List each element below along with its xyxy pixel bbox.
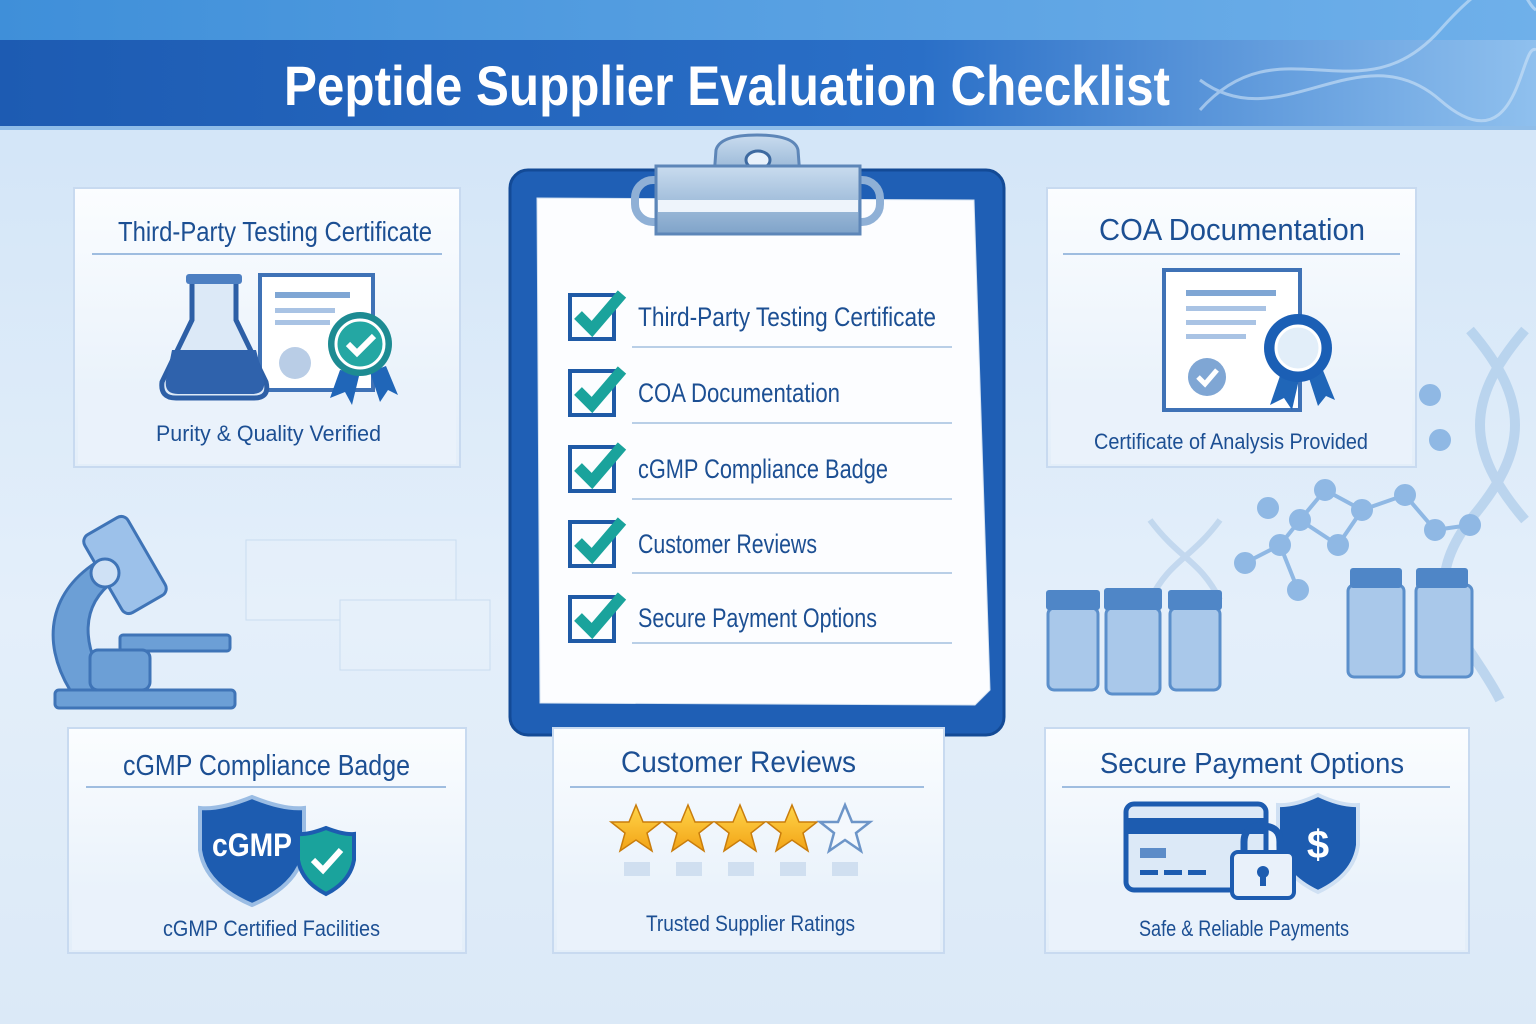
- icon: clip: [635, 135, 880, 234]
- title banner: [0, 40, 1536, 130]
- title banner: Peptide Supplier Evaluation Checklist: [284, 54, 1170, 117]
- checklist: Third-Party Testing Certificate: [638, 302, 936, 332]
- checklist: cGMP Compliance Badge: [638, 454, 888, 484]
- caption: Safe & Reliable Payments: [1139, 916, 1349, 941]
- icon: vials: [1046, 568, 1472, 694]
- panel: customer reviews: [553, 728, 944, 953]
- panel: cGMP: [68, 728, 466, 953]
- panel: COA documentation: [1047, 188, 1416, 467]
- icon: flask and certificate: [162, 274, 398, 405]
- heading: COA Documentation: [1099, 212, 1365, 247]
- icon: certificate with ribbon: [1164, 270, 1335, 410]
- panel: secure payment: [1045, 728, 1469, 953]
- icon: molecule: [1236, 386, 1479, 599]
- checklist: COA Documentation: [638, 378, 840, 408]
- caption: Trusted Supplier Ratings: [646, 911, 855, 936]
- panel: third-party testing: [74, 188, 460, 467]
- heading: cGMP Compliance Badge: [123, 750, 410, 782]
- caption: cGMP Certified Facilities: [163, 916, 380, 941]
- background: lab scene: [246, 330, 1525, 700]
- heading: Customer Reviews: [621, 746, 856, 779]
- clipboard: [510, 135, 1004, 735]
- icon: dna helix top right: [1200, 0, 1536, 121]
- checklist: [570, 294, 936, 641]
- icon: stars: [611, 805, 870, 876]
- icon: cgmp shield: [200, 797, 354, 905]
- icon: card lock shield: $: [1307, 823, 1329, 867]
- icon: cgmp shield: cGMP: [212, 827, 292, 863]
- heading: Secure Payment Options: [1100, 748, 1404, 780]
- checklist: Secure Payment Options: [638, 603, 877, 633]
- icon: microscope: [53, 514, 235, 708]
- caption: Purity & Quality Verified: [156, 421, 381, 446]
- caption: Certificate of Analysis Provided: [1094, 429, 1368, 454]
- heading: Third-Party Testing Certificate: [118, 216, 432, 247]
- icon: card lock shield: [1126, 795, 1358, 898]
- checklist: Customer Reviews: [638, 529, 817, 559]
